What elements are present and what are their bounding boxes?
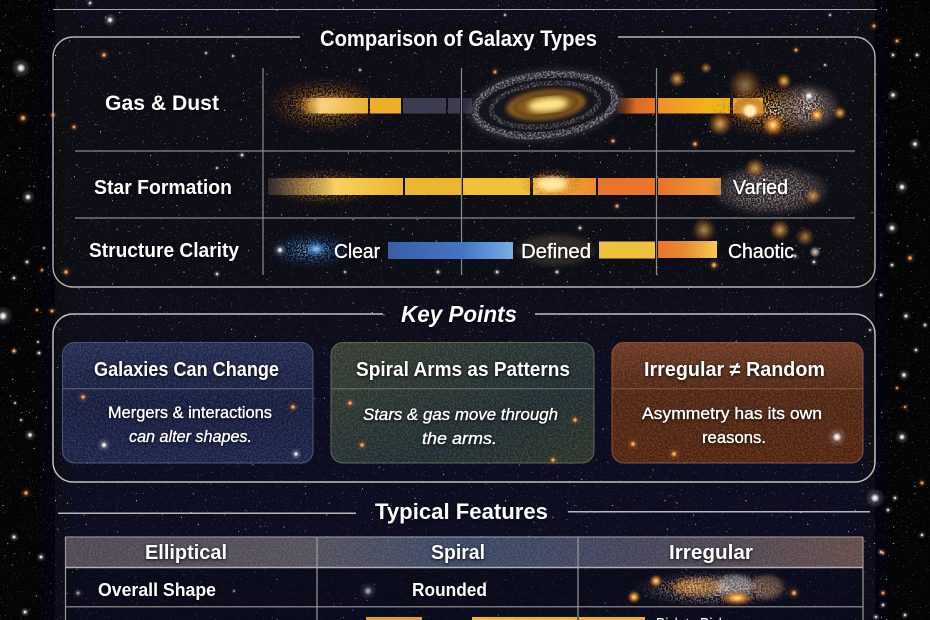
card body: the arms. [422, 429, 497, 448]
cell: rounded: Rounded [412, 579, 487, 600]
heading: Typical Features [375, 499, 548, 524]
heading: Key Points [401, 301, 517, 327]
label: gas and dust: Gas & Dust [105, 92, 219, 115]
table header band [65, 537, 863, 567]
spiral galaxy [464, 61, 626, 149]
column header: elliptical: Elliptical [145, 542, 227, 564]
row label: overall shape: Overall Shape [98, 579, 216, 600]
row: star formation [94, 157, 836, 220]
value: chaotic: Chaotic [728, 241, 794, 263]
panel frame with title gap [53, 314, 875, 482]
card title: Spiral Arms as Patterns [356, 359, 570, 381]
label: star formation: Star Formation [94, 177, 232, 199]
card body [108, 403, 272, 446]
card: spiral arms as patterns [331, 342, 594, 466]
section: typical features [58, 499, 870, 620]
value: varied: Varied [733, 177, 788, 199]
heading rules [58, 512, 870, 513]
card title: Galaxies Can Change [94, 359, 279, 381]
card title: Irregular ≠ Random [644, 359, 825, 381]
column header: spiral: Spiral [431, 542, 485, 564]
row: structure clarity [89, 217, 821, 272]
panel frame with title gap [53, 37, 875, 287]
card body: reasons. [702, 428, 766, 447]
card: irregular is not random [612, 342, 863, 463]
label: structure clarity: Structure Clarity [89, 240, 240, 262]
card: galaxies can change [62, 342, 313, 463]
top divider line [53, 8, 877, 10]
panel: key points [53, 301, 875, 482]
irregular galaxy thumbnail [627, 569, 803, 609]
card body: Stars & gas move through [363, 405, 558, 424]
irregular galaxy clusters [668, 62, 847, 150]
table grid lines [75, 68, 855, 275]
table grid lines [65, 537, 863, 620]
heading: Comparison of Galaxy Types [320, 26, 597, 51]
partial row bars [366, 617, 645, 620]
card body: Mergers & interactions [108, 403, 272, 422]
card body [642, 404, 822, 447]
table body background [65, 568, 863, 620]
value: clear: Clear [334, 241, 380, 263]
row: gas and dust [105, 61, 847, 150]
card body: Asymmetry has its own [642, 404, 822, 423]
card body [363, 405, 558, 448]
card body: can alter shapes. [129, 427, 252, 446]
panel: comparison of galaxy types [53, 26, 875, 287]
value: defined: Defined [521, 241, 591, 263]
column header: irregular: Irregular [669, 542, 753, 564]
table [65, 537, 863, 620]
